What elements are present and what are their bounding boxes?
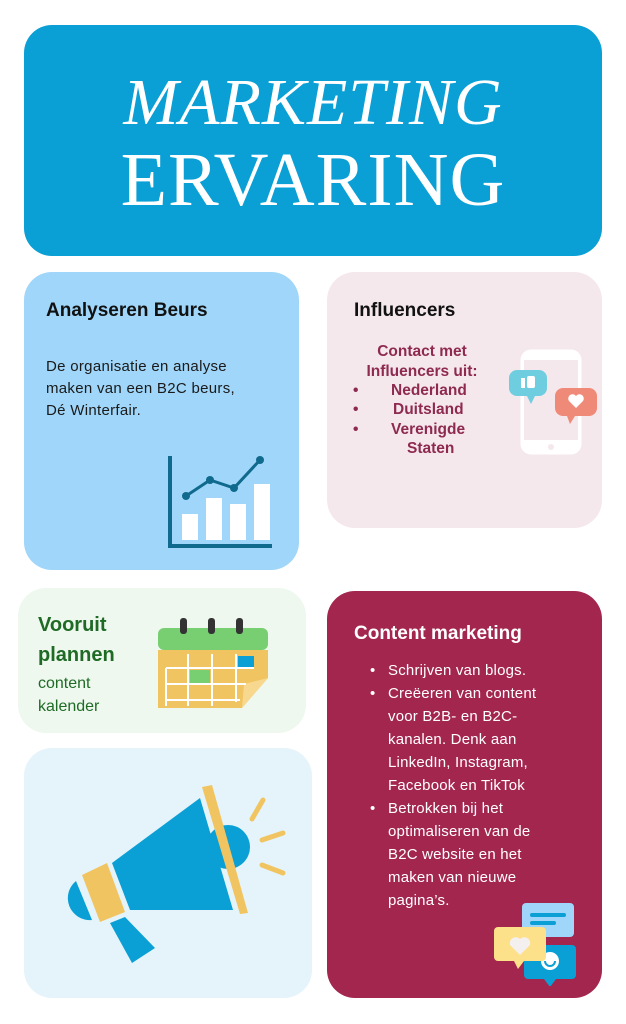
text block: countries: Nederland: [391, 382, 467, 399]
subtext: [38, 675, 100, 715]
bullet list: •: [370, 662, 375, 679]
icon: phone with reactions: [509, 350, 597, 454]
chart icon: [168, 456, 272, 548]
title: ervaring: ERVARING: [121, 138, 505, 222]
bullet list: optimaliseren van de: [388, 823, 530, 840]
bullet list: voor B2B- en B2C-: [388, 708, 517, 725]
title panel: [24, 25, 602, 256]
bullet list: LinkedIn, Instagram,: [388, 754, 528, 771]
bullet list: Facebook en TikTok: [388, 777, 525, 794]
bullet list: •: [370, 685, 375, 702]
heading: Content marketing: [354, 623, 522, 644]
text block: De organisatie en analyse: [46, 358, 227, 375]
heading: Analyseren Beurs: [46, 300, 208, 321]
bullet list: B2C website en het: [388, 846, 522, 863]
text block: countries: [353, 343, 478, 457]
text block: countries: Contact met: [377, 343, 467, 360]
text block: [46, 358, 235, 419]
bullet list: •: [370, 800, 375, 817]
bullet list: maken van nieuwe: [388, 869, 516, 886]
text block: countries: •: [353, 421, 358, 438]
text block: maken van een B2C beurs,: [46, 380, 235, 397]
icon: chat bubbles: [494, 903, 576, 986]
panel: content marketing: [327, 591, 602, 998]
icon: calendar: [158, 618, 268, 708]
text block: countries: Duitsland: [393, 401, 464, 418]
bullet list: pagina’s.: [388, 892, 450, 909]
text block: countries: Staten: [407, 440, 454, 457]
text block: countries: •: [353, 401, 358, 418]
bullet list: Creëeren van content: [388, 685, 536, 702]
icon: megaphone: [68, 785, 286, 963]
subtext: kalender: [38, 698, 99, 715]
panel: analyseren beurs: [24, 272, 299, 570]
subtext: content: [38, 675, 90, 692]
heading: [38, 614, 115, 666]
heading: Influencers: [354, 300, 455, 321]
panel: megaphone: [24, 748, 312, 998]
bullet list: kanalen. Denk aan: [388, 731, 516, 748]
text block: Dé Winterfair.: [46, 402, 141, 419]
panel: influencers: [327, 272, 602, 528]
heading: plannen: [38, 644, 115, 666]
bullet list: Schrijven van blogs.: [388, 662, 526, 679]
text block: countries: Influencers uit:: [366, 362, 478, 380]
text block: countries: Verenigde: [391, 421, 465, 438]
panel: vooruit plannen: [18, 588, 306, 733]
bullet list: [370, 662, 536, 909]
heading: Vooruit: [38, 614, 107, 636]
text block: countries: •: [353, 382, 358, 399]
bullet list: Betrokken bij het: [388, 800, 503, 817]
title: marketing: MARKETING: [123, 66, 503, 139]
